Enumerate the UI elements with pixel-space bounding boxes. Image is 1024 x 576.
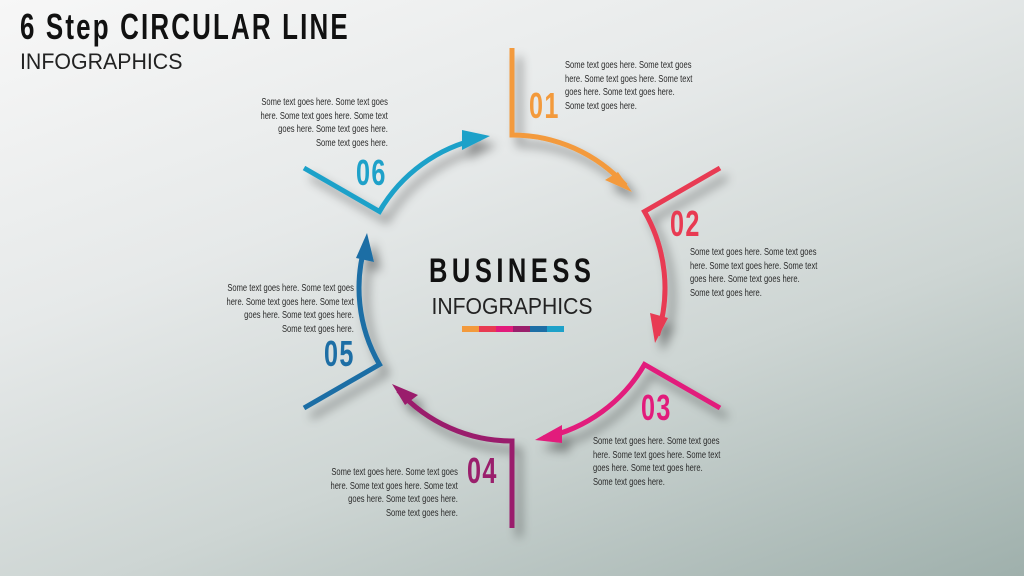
step 01 arrow bbox=[512, 48, 632, 192]
text 03: Some text goes here. Some text goes bbox=[593, 435, 719, 447]
step 06 arrow bbox=[304, 130, 490, 212]
center heading: BUSINESS bbox=[429, 252, 595, 290]
text 03 bbox=[593, 435, 720, 488]
text 04: Some text goes here. bbox=[386, 506, 458, 518]
text 02: Some text goes here. Some text goes bbox=[690, 246, 816, 258]
text 03: Some text goes here. bbox=[593, 476, 665, 488]
number 04: 04 bbox=[467, 450, 498, 491]
number 01: 01 bbox=[529, 85, 560, 126]
step 03 arrow bbox=[535, 364, 720, 443]
text 05: here. Some text goes here. Some text bbox=[227, 296, 354, 308]
number 05: 05 bbox=[324, 333, 355, 374]
text 06: here. Some text goes here. Some text bbox=[261, 110, 388, 122]
text 06: Some text goes here. bbox=[316, 136, 388, 148]
text 03: goes here. Some text goes here. bbox=[593, 462, 703, 474]
text 04 bbox=[331, 466, 458, 518]
text 02 bbox=[690, 246, 818, 298]
text 05 bbox=[227, 282, 354, 334]
text 04: Some text goes here. Some text goes bbox=[332, 466, 458, 478]
text 05: goes here. Some text goes here. bbox=[244, 309, 354, 321]
text 06 bbox=[261, 96, 388, 148]
subtitle: INFOGRAPHICS bbox=[20, 49, 182, 74]
text 02: goes here. Some text goes here. bbox=[690, 273, 800, 285]
step 02 arrow bbox=[644, 168, 720, 343]
text 01: Some text goes here. bbox=[565, 100, 637, 112]
number 02: 02 bbox=[670, 203, 701, 244]
text 05: Some text goes here. Some text goes bbox=[228, 282, 354, 294]
title: 6 Step CIRCULAR LINE bbox=[20, 6, 350, 47]
number 06: 06 bbox=[356, 152, 387, 193]
text 04: here. Some text goes here. Some text bbox=[331, 480, 458, 492]
text 01: here. Some text goes here. Some text bbox=[565, 72, 692, 84]
text 06: Some text goes here. Some text goes bbox=[262, 96, 388, 108]
text 01: goes here. Some text goes here. bbox=[565, 86, 675, 98]
text 03: here. Some text goes here. Some text bbox=[593, 448, 720, 460]
color bar bbox=[462, 326, 564, 332]
text 04: goes here. Some text goes here. bbox=[348, 493, 458, 505]
text 01 bbox=[565, 59, 692, 112]
text 06: goes here. Some text goes here. bbox=[278, 123, 388, 135]
number 03: 03 bbox=[641, 387, 672, 428]
text 02: Some text goes here. bbox=[690, 286, 762, 298]
center subheading: INFOGRAPHICS bbox=[431, 293, 593, 319]
text 02: here. Some text goes here. Some text bbox=[690, 260, 817, 272]
text 05: Some text goes here. bbox=[282, 322, 354, 334]
step 04 arrow bbox=[392, 384, 512, 528]
text 01: Some text goes here. Some text goes bbox=[565, 59, 691, 71]
step 05 arrow bbox=[304, 233, 380, 408]
